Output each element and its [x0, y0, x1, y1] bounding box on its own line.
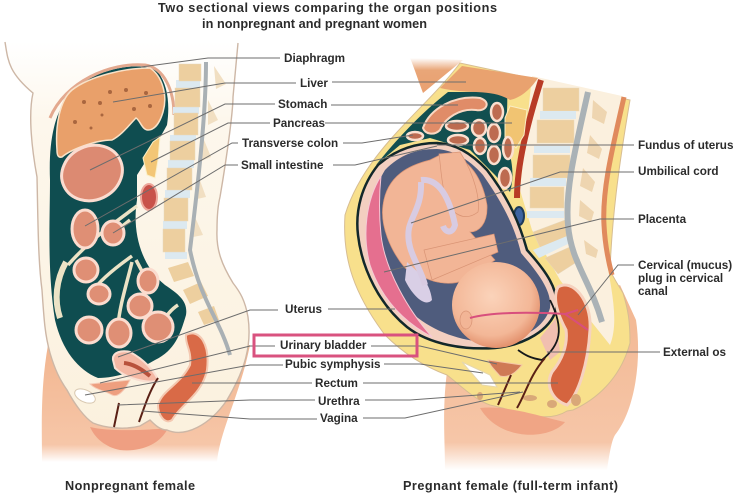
- lilac membrane: [405, 262, 432, 302]
- umbilical cord: [408, 180, 455, 285]
- labels: plug in cervical: [638, 272, 723, 285]
- liver: [57, 68, 165, 157]
- title: [158, 1, 497, 31]
- upper skin: [410, 58, 463, 93]
- peritoneal cavity: [49, 66, 186, 378]
- orange dorsal band: [604, 97, 624, 275]
- liver: [440, 66, 538, 100]
- labels: Pancreas: [273, 117, 325, 130]
- intestine mesentery: [68, 206, 178, 325]
- stomach: [423, 98, 487, 134]
- labels: Small intestine: [241, 159, 324, 172]
- labels: [241, 52, 734, 425]
- stomach: [52, 135, 132, 211]
- figure: pregnant female section: [345, 58, 638, 493]
- bladder: [488, 360, 522, 377]
- diaphragm: [50, 65, 174, 118]
- title: in nonpregnant and pregnant women: [202, 17, 427, 31]
- vertebral column: [163, 62, 230, 355]
- pink marker line: [470, 310, 588, 330]
- uterus wall: [357, 143, 557, 348]
- labels: Placenta: [638, 213, 687, 226]
- labels: Umbilical cord: [638, 165, 719, 178]
- transverse colon cut: [141, 184, 157, 210]
- labels: Stomach: [278, 98, 327, 111]
- cervix: [540, 318, 560, 360]
- fat mesentery strip: [57, 262, 66, 318]
- labels: Rectum: [315, 377, 358, 390]
- vulva: [480, 408, 565, 435]
- pancreas: [505, 106, 527, 148]
- labels: Cervical (mucus): [638, 259, 732, 272]
- leader lines: [85, 58, 660, 419]
- urethra and vagina: [498, 358, 545, 408]
- urethra and vagina: [114, 378, 158, 427]
- rectum: [158, 333, 208, 421]
- labels: Urethra: [318, 395, 360, 408]
- aorta: [517, 80, 541, 198]
- fetus limb: [439, 152, 478, 217]
- caption: Pregnant female (full-term infant): [403, 479, 618, 493]
- body wall: [345, 63, 630, 417]
- bladder: [90, 380, 130, 396]
- rectum: [549, 285, 590, 405]
- pubic symphysis: [462, 362, 497, 387]
- intestine loops: [407, 103, 513, 188]
- labels: Pubic symphysis: [285, 358, 381, 371]
- labels: Vagina: [320, 412, 358, 425]
- labels: canal: [638, 285, 668, 298]
- figure: nonpregnant female section: [5, 42, 250, 493]
- uterus: [113, 351, 158, 382]
- skin lower body: [42, 345, 250, 462]
- labels: Liver: [300, 77, 328, 90]
- labels: Diaphragm: [284, 52, 345, 65]
- skin lower body: [444, 285, 638, 470]
- pubic symphysis: [72, 386, 98, 406]
- caption: Nonpregnant female: [65, 479, 195, 493]
- labels: External os: [663, 346, 727, 359]
- placenta: [366, 176, 432, 337]
- spinal canal: [567, 92, 602, 322]
- dark wall line: [518, 300, 559, 360]
- labels: Uterus: [285, 303, 323, 316]
- labels: Transverse colon: [242, 137, 338, 150]
- title: Two sectional views comparing the organ positions: [158, 1, 497, 15]
- body section: [5, 42, 249, 432]
- vertebrae: [527, 88, 580, 274]
- highlight box: urinary bladder: [254, 335, 417, 356]
- labels: Fundus of uterus: [638, 139, 734, 152]
- fetus body: [382, 155, 495, 283]
- ear: [460, 311, 472, 329]
- pancreas: [143, 137, 160, 178]
- spine background: [520, 76, 622, 345]
- labels: Urinary bladder: [280, 339, 367, 352]
- abdominal organs area: [376, 90, 512, 192]
- vulva: [90, 427, 168, 450]
- sphincter ovals: [477, 392, 581, 408]
- fetus head: [452, 262, 540, 348]
- intestine loops: [72, 210, 98, 248]
- body outline left: [5, 42, 249, 432]
- amniotic cavity: [371, 149, 550, 342]
